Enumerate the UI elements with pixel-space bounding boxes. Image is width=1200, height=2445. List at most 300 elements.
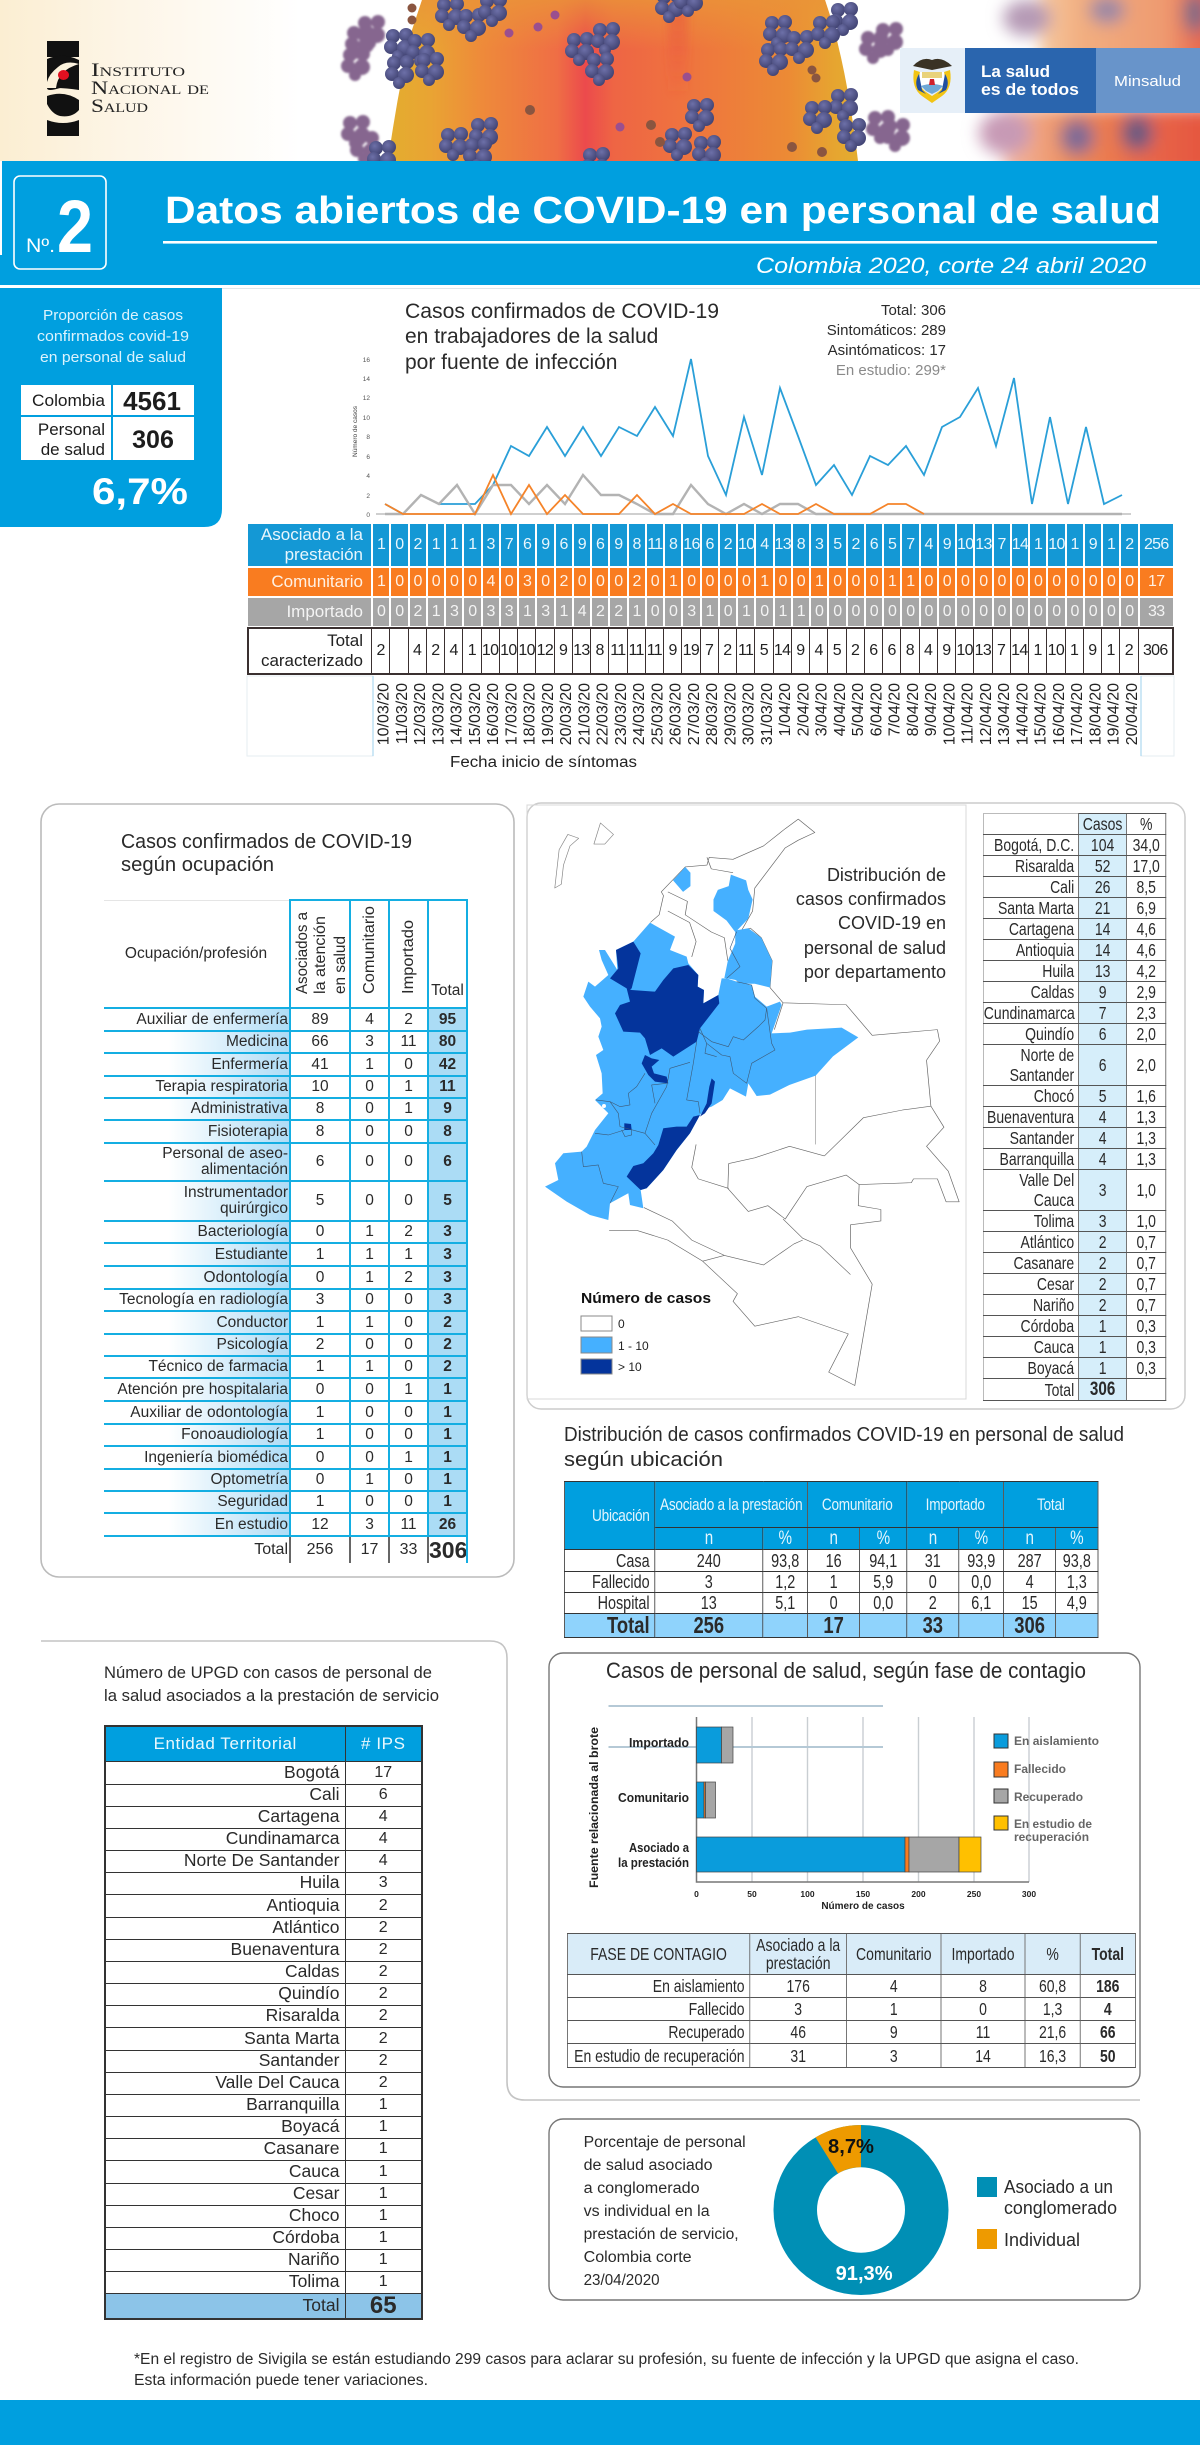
table: ocupación: Estudiante	[215, 1246, 288, 1262]
table: fase de contagio: 31	[790, 2046, 805, 2066]
table: casos por departamento: 0,7	[1136, 1232, 1156, 1252]
panel: casos según ocupación: Asociados a	[294, 912, 311, 994]
table: ubicación: 5,9	[873, 1572, 893, 1592]
map heading: COVID-19 en	[838, 913, 946, 933]
logo: Minsalud: es de todos	[981, 80, 1079, 99]
table: casos por departamento: 52	[1095, 856, 1110, 876]
table: casos por fuente y fecha: prestación	[285, 545, 363, 564]
table: casos por fuente y fecha: 1	[1034, 536, 1042, 553]
table: ubicación: %	[1070, 1528, 1083, 1549]
table: casos por fuente y fecha: 33	[1148, 603, 1164, 620]
date axis: 9/04/20	[923, 683, 940, 736]
table: UPGD por entidad territorial: # IPS	[361, 1734, 406, 1753]
description text: a conglomerado	[584, 2180, 700, 2197]
table: casos por fuente y fecha: Comunitario	[271, 572, 363, 591]
panel: casos según ocupación	[41, 804, 514, 1577]
panel: mapa por departamento	[527, 803, 1185, 1409]
map legend	[581, 1290, 711, 1374]
table: UPGD por entidad territorial: Buenaventura	[231, 1939, 340, 1959]
table: UPGD por entidad territorial: Norte De Santander	[184, 1850, 340, 1870]
table: casos por departamento: 1,3	[1136, 1128, 1156, 1148]
table: ocupación: 0	[316, 1381, 324, 1398]
date axis: 20/04/20	[1124, 683, 1141, 745]
table: casos por departamento: Tolima	[1034, 1211, 1074, 1231]
table: ocupación: 8	[443, 1123, 452, 1140]
table: casos por departamento: Caldas	[1031, 982, 1074, 1002]
table: casos por fuente y fecha: 0	[1016, 573, 1024, 590]
table: ocupación: 0	[404, 1426, 413, 1443]
logo: Instituto Nacional de Salud: Instituto	[91, 60, 185, 81]
line chart: casos por fecha: 6	[366, 454, 370, 461]
table: casos por fuente y fecha: 2	[723, 642, 731, 659]
table: ocupación: 12	[311, 1516, 329, 1533]
panel: casos según ocupación: Comunitario	[361, 906, 378, 994]
table: casos por fuente y fecha: 9	[541, 536, 549, 553]
table: fase de contagio: 11	[975, 2022, 990, 2042]
table: ubicación: %	[877, 1528, 890, 1549]
table: casos por departamento: Cartagena	[1009, 919, 1074, 939]
chart legend: En aislamiento	[1014, 1734, 1099, 1748]
table: fase de contagio: Recuperado	[668, 2022, 744, 2042]
table: casos por fuente y fecha: 3	[487, 603, 495, 620]
table: ocupación: 26	[439, 1516, 456, 1533]
table: casos por fuente y fecha: 11	[610, 642, 625, 659]
date axis: 14/03/20	[449, 683, 466, 745]
table: UPGD por entidad territorial: 1	[379, 2096, 388, 2113]
table: ocupación: 9	[443, 1100, 452, 1117]
table: fase de contagio: 60,8	[1038, 1976, 1066, 1996]
table: ocupación: 8	[316, 1123, 324, 1140]
date axis: 2/04/20	[795, 683, 812, 736]
table: UPGD por entidad territorial: 1	[379, 2118, 388, 2135]
table: casos por departamento: Risaralda	[1015, 856, 1074, 876]
heading: casos por fuente de infección: en trabajadores de la salud	[405, 325, 658, 348]
table: ocupación: Total	[254, 1541, 288, 1558]
table: casos por fuente y fecha: Total	[327, 631, 363, 650]
table: ubicación: Casa	[616, 1550, 650, 1570]
table: casos por fuente y fecha: 6	[869, 642, 877, 659]
table: casos por fuente y fecha: 0	[1107, 603, 1115, 620]
table: casos por fuente y fecha: 0	[1034, 573, 1042, 590]
table: casos por fuente y fecha: 0	[925, 603, 933, 620]
table: casos por fuente y fecha: 1	[523, 603, 531, 620]
map heading: personal de salud	[804, 938, 946, 958]
table: ubicación: 6,1	[971, 1593, 991, 1613]
date axis: 6/04/20	[868, 683, 885, 736]
panel: casos según ocupación: Importado	[400, 920, 417, 994]
table: casos por fuente y fecha: 0	[943, 603, 951, 620]
heading: distribución según ubicación	[564, 1424, 1124, 1471]
table: ubicación: 1,2	[775, 1572, 795, 1592]
table: ocupación: Total	[431, 982, 464, 998]
table: casos por fuente y fecha: 2	[1125, 536, 1133, 553]
table: UPGD por entidad territorial: Risaralda	[266, 2005, 340, 2025]
table: UPGD por entidad territorial: 1	[379, 2251, 388, 2268]
date axis	[247, 676, 1174, 771]
table: ocupación: 1	[316, 1404, 324, 1421]
table: UPGD por entidad territorial: 4	[379, 1852, 388, 1869]
donut legend: Individual	[1004, 2230, 1080, 2250]
table: casos por fuente y fecha: 14	[774, 642, 790, 659]
table: UPGD por entidad territorial: Cauca	[289, 2161, 340, 2181]
table: UPGD por entidad territorial: 2	[379, 2074, 388, 2091]
table: casos por departamento: Cali	[1050, 877, 1074, 897]
table: casos por fuente y fecha: 0	[961, 573, 969, 590]
main title: Datos abiertos de COVID-19 en personal de salud	[165, 190, 1161, 232]
table: casos por departamento: Quindío	[1025, 1024, 1074, 1044]
table: ocupación: 1	[316, 1426, 324, 1443]
table: ocupación: Técnico de farmacia	[148, 1358, 288, 1375]
table: fase de contagio: prestación	[765, 1953, 830, 1973]
table: UPGD por entidad territorial: 2	[379, 1985, 388, 2002]
line chart: casos por fecha: 14	[363, 376, 370, 383]
table: casos por departamento: 4,2	[1136, 961, 1156, 981]
table: casos por fuente y fecha: 1	[377, 573, 385, 590]
table: ubicación: 93,8	[1063, 1550, 1091, 1570]
table: ocupación: Fonoaudiología	[181, 1426, 288, 1443]
table: casos por departamento: Cundinamarca	[984, 1003, 1075, 1023]
table: UPGD por entidad territorial: 2	[379, 1919, 388, 1936]
table: UPGD por entidad territorial: Boyacá	[281, 2116, 340, 2136]
table: casos por fuente y fecha: 8	[797, 536, 805, 553]
table: casos por fuente y fecha: 1	[468, 642, 476, 659]
donut chart: 91,3%	[836, 2263, 893, 2285]
table: casos por departamento: 1	[1099, 1316, 1106, 1336]
panel frame: UPGD	[41, 1641, 1140, 2100]
line chart: casos por fecha: 0	[366, 512, 370, 519]
table: ocupación: 2	[404, 1011, 413, 1028]
table: casos por departamento: Valle Del	[1019, 1170, 1074, 1190]
table: ubicación	[564, 1481, 1098, 1638]
table: casos por fuente y fecha: 1	[669, 573, 677, 590]
table: casos por fuente y fecha: 2	[414, 536, 422, 553]
heading: distribución según ubicación: Distribución de casos confirmados COVID-19 en personal de salud	[564, 1424, 1124, 1446]
donut legend: conglomerado	[1004, 2198, 1117, 2218]
table: ocupación: Personal de aseo-	[162, 1145, 288, 1162]
icon: escudo	[913, 59, 952, 103]
table: casos por fuente y fecha: 11	[647, 642, 662, 659]
table: UPGD por entidad territorial: Total	[303, 2295, 340, 2315]
table: casos por fuente y fecha: 7	[997, 642, 1005, 659]
map legend: 0	[618, 1317, 625, 1331]
table: ocupación: 2	[443, 1314, 452, 1331]
stacked bar chart: 150	[856, 1889, 870, 1899]
table: fase de contagio: 1	[889, 1999, 897, 2019]
panel: proporción de casos: de salud	[41, 440, 105, 459]
table: fase de contagio: Fallecido	[688, 1999, 744, 2019]
date axis: 28/03/20	[704, 683, 721, 745]
table: ocupación: 2	[443, 1336, 452, 1353]
table: UPGD por entidad territorial: 1	[379, 2273, 388, 2290]
map heading: casos confirmados	[796, 889, 946, 909]
line chart: casos por fecha: 10	[363, 415, 370, 422]
table: ocupación: 0	[365, 1404, 374, 1421]
table: ocupación: 0	[365, 1153, 374, 1170]
table: ocupación: 0	[365, 1123, 374, 1140]
table: casos por fuente y fecha: 0	[432, 573, 440, 590]
description text: Porcentaje de personal	[584, 2134, 746, 2151]
table: ocupación: Auxiliar de odontología	[130, 1404, 288, 1420]
table: fase de contagio: 9	[889, 2022, 897, 2042]
table: ocupación: 0	[316, 1471, 324, 1488]
table: casos por fuente y fecha: 0	[377, 603, 385, 620]
table: casos por fuente y fecha: 0	[852, 573, 860, 590]
table: UPGD por entidad territorial: Antioquia	[267, 1895, 340, 1915]
table: casos por fuente y fecha: 0	[925, 573, 933, 590]
table: ocupación: 1	[443, 1449, 452, 1466]
chart legend: Recuperado	[1014, 1790, 1083, 1804]
table: casos por departamento: 21	[1095, 898, 1110, 918]
table: casos por departamento: 9	[1099, 982, 1106, 1002]
table: ubicación: 31	[925, 1550, 941, 1570]
table: casos por fuente y fecha: 8	[596, 642, 604, 659]
table: UPGD por entidad territorial: Cartagena	[258, 1806, 340, 1826]
table: casos por fuente y fecha: 6	[888, 642, 896, 659]
table: casos por departamento: 8,5	[1136, 877, 1156, 897]
table: casos por fuente y fecha: 8	[669, 536, 677, 553]
heading: distribución según ubicación: según ubicación	[564, 1449, 723, 1471]
table: casos por fuente y fecha: 12	[537, 642, 553, 659]
table: UPGD por entidad territorial: 1	[379, 2185, 388, 2202]
table: casos por fuente y fecha: 0	[852, 603, 860, 620]
table: fase de contagio: Total	[1091, 1944, 1124, 1964]
table: casos por fuente y fecha: 0	[706, 573, 714, 590]
table: casos por fuente y fecha: 0	[870, 573, 878, 590]
table: ubicación: 1	[830, 1572, 838, 1592]
table: casos por fuente y fecha: 0	[943, 573, 951, 590]
table: casos por departamento: 14	[1095, 940, 1110, 960]
table: UPGD por entidad territorial: Valle Del Cauca	[215, 2072, 340, 2092]
table: ocupación: 3	[443, 1291, 452, 1308]
table: ocupación: 1	[365, 1358, 374, 1375]
table: casos por departamento: Cesar	[1037, 1274, 1074, 1294]
table: ocupación: Terapia respiratoria	[155, 1078, 288, 1095]
case totals: Total: 306	[881, 302, 946, 319]
table: casos por departamento: 4	[1099, 1149, 1106, 1169]
table: casos por fuente y fecha: 11	[647, 536, 662, 553]
logo: Instituto Nacional de Salud: Nacional de	[91, 78, 209, 99]
table: casos por departamento: 1	[1099, 1358, 1106, 1378]
table: fase de contagio: 3	[889, 2046, 897, 2066]
table: casos por fuente y fecha: 4	[413, 642, 421, 659]
table: ocupación: 4	[365, 1011, 374, 1028]
table: casos por fuente y fecha: Asociado a la	[261, 525, 363, 544]
table: ocupación: 42	[439, 1056, 456, 1073]
line chart: casos por fecha: Número de casos	[352, 405, 359, 457]
table: ubicación: Asociado a la prestación	[660, 1495, 802, 1514]
date axis: 17/03/20	[503, 683, 520, 745]
table: casos por fuente y fecha: 9	[796, 642, 804, 659]
table: casos por fuente y fecha: 3	[815, 536, 823, 553]
table: casos por fuente y fecha: 0	[906, 603, 914, 620]
table: casos por fuente y fecha: 0	[998, 573, 1006, 590]
table: casos por fuente y fecha: 4	[760, 536, 768, 553]
table: ocupación: 2	[404, 1269, 413, 1286]
table: casos por departamento: 0,3	[1136, 1337, 1156, 1357]
table: casos por fuente y fecha: 10	[1048, 642, 1064, 659]
table: casos por departamento: 0,7	[1136, 1274, 1156, 1294]
table: ocupación: 95	[439, 1011, 456, 1028]
table: casos por fuente y fecha: 9	[1088, 642, 1096, 659]
table: casos por fuente y fecha: 17	[1148, 573, 1164, 590]
table: ocupación: 0	[365, 1381, 374, 1398]
table: casos por departamento: Santa Marta	[998, 898, 1074, 918]
table: ocupación: 1	[404, 1078, 413, 1095]
table: casos por departamento: 2,0	[1136, 1024, 1156, 1044]
table: casos por fuente y fecha: 0	[870, 603, 878, 620]
date axis: 10/03/20	[376, 683, 393, 745]
heading: número de UPGD: Número de UPGD con casos de personal de	[104, 1664, 432, 1682]
table: casos por departamento: Cauca	[1034, 1190, 1074, 1210]
table: ubicación: Ubicación	[592, 1506, 650, 1525]
table: ocupación: 3	[443, 1269, 452, 1286]
description text: vs individual en la	[584, 2203, 710, 2220]
line chart: casos por fecha	[352, 357, 1131, 519]
table: fase de contagio: 176	[786, 1976, 809, 1996]
table: ocupación: Enfermería	[211, 1056, 288, 1072]
table: casos por fuente y fecha: 1	[1107, 536, 1115, 553]
table: casos por fuente y fecha: 0	[614, 573, 622, 590]
table: casos por fuente y fecha: 7	[906, 536, 914, 553]
table: ocupación: 1	[365, 1471, 374, 1488]
table: casos por departamento: 5	[1099, 1086, 1106, 1106]
date axis: 20/03/20	[558, 683, 575, 745]
table: casos por fuente y fecha: 3	[450, 603, 458, 620]
table: fase de contagio: %	[1046, 1944, 1058, 1964]
table: casos por fuente y fecha: 0	[1071, 603, 1079, 620]
table: ocupación: Optometría	[210, 1471, 288, 1488]
table: fase de contagio: Comunitario	[856, 1944, 931, 1964]
table: casos por fuente y fecha: 0	[888, 603, 896, 620]
table: casos por fuente y fecha: 10	[957, 536, 973, 553]
table: casos por fuente y fecha: 2	[431, 642, 439, 659]
date axis: 3/04/20	[814, 683, 831, 736]
table: ocupación: 1	[404, 1246, 413, 1263]
table: UPGD por entidad territorial: Choco	[289, 2205, 340, 2225]
table: ubicación: n	[1026, 1528, 1034, 1549]
map of Colombia	[545, 819, 959, 1386]
table: ocupación: 2	[443, 1358, 452, 1375]
table: fase de contagio: Asociado a la	[756, 1935, 840, 1955]
table: casos por departamento: 1	[1099, 1337, 1106, 1357]
line chart: casos por fecha: 4	[366, 473, 370, 480]
panel: casos según ocupación: en salud	[332, 936, 349, 994]
table: casos por fuente y fecha: 0	[979, 603, 987, 620]
date axis: 22/03/20	[595, 683, 612, 745]
table: casos por fuente y fecha: 4	[925, 536, 933, 553]
date axis: 19/03/20	[540, 683, 557, 745]
table: fase de contagio: FASE DE CONTAGIO	[590, 1944, 726, 1964]
table: casos por departamento: Boyacá	[1028, 1358, 1074, 1378]
panel: casos según ocupación: según ocupación	[121, 854, 274, 876]
table: casos por departamento: 6	[1099, 1024, 1106, 1044]
table: ocupación: 1	[443, 1426, 452, 1443]
panel: proporción de casos: 306	[132, 426, 174, 454]
table: casos por fuente y fecha: 9	[614, 536, 622, 553]
table: casos por fuente y fecha: 1	[450, 536, 458, 553]
table: casos por fuente y fecha: 0	[1052, 573, 1060, 590]
table: casos por fuente y fecha: 3	[541, 603, 549, 620]
table: casos por departamento: Antioquia	[1016, 940, 1074, 960]
date axis: 13/04/20	[996, 683, 1013, 745]
table: casos por departamento: Santander	[1010, 1128, 1074, 1148]
table: ubicación: 93,8	[771, 1550, 799, 1570]
table: casos por fuente y fecha: 0	[1125, 603, 1133, 620]
case totals: Asintómaticos: 17	[828, 342, 946, 359]
table: ocupación: 11	[400, 1033, 417, 1050]
table: casos por fuente y fecha: 0	[414, 573, 422, 590]
date axis: 30/03/20	[741, 683, 758, 745]
panel: proporción de casos: 6,7%	[92, 471, 188, 512]
table: casos por fuente y fecha: 2	[596, 603, 604, 620]
line chart: casos por fecha: 12	[363, 395, 370, 402]
table: UPGD por entidad territorial: 1	[379, 2140, 388, 2157]
logo: Instituto Nacional de Salud: Salud	[91, 96, 148, 117]
description text: Colombia corte	[584, 2249, 692, 2266]
table: casos por fuente y fecha: 10	[956, 642, 973, 659]
logo: Instituto Nacional de Salud	[47, 41, 209, 136]
stacked bar chart: 100	[800, 1889, 815, 1899]
table: casos por fuente y fecha: 1	[1034, 642, 1042, 659]
table: casos por departamento: Casos	[1083, 814, 1122, 834]
table: casos por departamento: Bogotá, D.C.	[994, 835, 1074, 855]
table: ocupación: 0	[365, 1100, 374, 1117]
date axis: 15/04/20	[1033, 683, 1050, 745]
table: casos por departamento: 1,3	[1136, 1149, 1156, 1169]
table: casos por fuente y fecha: 0	[687, 573, 695, 590]
table: UPGD por entidad territorial: Caldas	[285, 1961, 340, 1981]
table: ocupación: 89	[311, 1011, 329, 1028]
table: casos por fuente y fecha: 0	[578, 573, 586, 590]
panel: proporción de casos: confirmados covid-19	[37, 328, 189, 345]
table: casos por fuente y fecha: 4	[815, 642, 823, 659]
stacked bar chart: Comunitario	[618, 1790, 689, 1805]
date axis: 21/03/20	[576, 683, 593, 745]
table: casos por departamento: 6	[1099, 1055, 1106, 1075]
table: fase de contagio: 66	[1100, 2022, 1115, 2042]
table: casos por fuente y fecha: 0	[651, 573, 659, 590]
panel: fase de contagio	[549, 1653, 1140, 2087]
table: ubicación: %	[779, 1528, 792, 1549]
table: ubicación: 240	[697, 1550, 721, 1570]
table: ocupación: 80	[439, 1033, 456, 1050]
table: casos por fuente y fecha: 1	[560, 603, 568, 620]
table: casos por fuente y fecha: 10	[738, 536, 754, 553]
table: casos por fuente y fecha: 2	[377, 642, 385, 659]
table: casos por departamento: 0,3	[1136, 1358, 1156, 1378]
table: ocupación: 3	[443, 1223, 452, 1240]
table: ocupación: 1	[404, 1100, 413, 1117]
table: casos por fuente y fecha: 13	[975, 536, 992, 553]
table: ocupación: 2	[404, 1223, 413, 1240]
table: ubicación: 1,3	[1067, 1572, 1087, 1592]
table: UPGD por entidad territorial: Cali	[309, 1784, 340, 1804]
table: casos por fuente y fecha: 11	[738, 642, 753, 659]
table: UPGD por entidad territorial: Santa Marta	[244, 2028, 340, 2048]
table: ocupación: 0	[404, 1291, 413, 1308]
table: casos por departamento	[983, 813, 1166, 1401]
header photo: coronavirus	[0, 0, 1200, 181]
date axis: 10/04/20	[941, 683, 958, 745]
table: ocupación: 0	[316, 1223, 324, 1240]
table: casos por departamento: Casanare	[1013, 1253, 1074, 1273]
table: casos por departamento: 2	[1099, 1274, 1106, 1294]
table: casos por fuente y fecha: 0	[1107, 573, 1115, 590]
table: ubicación: 0,0	[971, 1572, 991, 1592]
table: casos por departamento: Córdoba	[1020, 1316, 1074, 1336]
table: casos por fuente y fecha: 6	[523, 536, 531, 553]
table: ocupación: 0	[365, 1426, 374, 1443]
